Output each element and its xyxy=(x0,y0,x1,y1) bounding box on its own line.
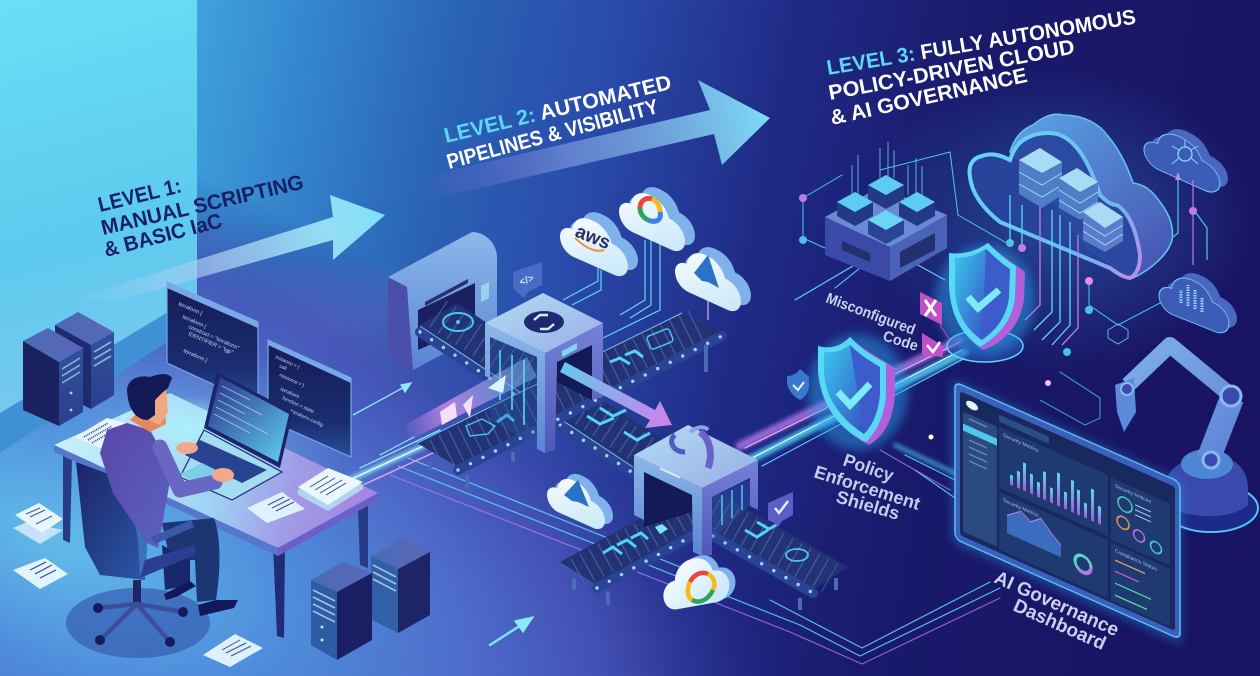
heading: level 1: LEVEL 1: xyxy=(96,175,184,217)
machine: source printer xyxy=(388,232,497,370)
papers: desk right xyxy=(247,468,363,523)
torso xyxy=(100,423,172,548)
heading: level 3: POLICY-DRIVEN CLOUD xyxy=(827,35,1077,105)
heading: level 2: PIPELINES & VISIBILITY xyxy=(444,95,661,174)
heading: level 3 xyxy=(825,6,1138,130)
chair base xyxy=(66,580,210,658)
conveyor: upper left to lower right xyxy=(420,303,670,473)
code window: terraform right: function = state xyxy=(281,395,315,415)
heading: level 1: MANUAL SCRIPTING xyxy=(99,171,306,240)
arrow: level 1 to level 2 xyxy=(70,195,385,300)
icon: small cloud chart xyxy=(1159,262,1237,337)
code window: terraform left: IDENTIFIER = "tgp" xyxy=(187,331,234,356)
code window: terraform left: terraform { xyxy=(177,301,203,317)
panel: level 3 autonomous governance xyxy=(787,114,1258,655)
arrow: output to next gate xyxy=(560,362,672,428)
dashboard rings: security notices: Security Notices xyxy=(1115,483,1151,505)
heading: level 3: & AI GOVERNANCE xyxy=(828,64,1029,130)
label: misconfigured code: Misconfigured xyxy=(824,290,918,339)
node dots xyxy=(799,194,1197,440)
chair back and seat xyxy=(76,462,195,580)
lines rising into cloud xyxy=(1010,195,1078,345)
legs xyxy=(162,518,238,616)
paper: desk left xyxy=(75,418,125,448)
icon: misconfigured check tag xyxy=(922,333,943,357)
panel: level 1 manual workspace xyxy=(13,282,430,667)
conveyor: lower left to upper right xyxy=(417,313,722,488)
code window: terraform right xyxy=(268,340,351,457)
icon: check bubble xyxy=(768,492,793,527)
hands xyxy=(176,442,234,482)
icon: laptop xyxy=(180,372,293,500)
heading: level 1: & BASIC IaC xyxy=(102,209,224,262)
policy shield base xyxy=(947,330,1023,362)
icon: back servers xyxy=(23,312,114,426)
dashboard progress: compliance status: Compliance Status xyxy=(1115,548,1157,573)
connector lines to clouds xyxy=(563,240,708,338)
code window: terraform left: terraform { xyxy=(182,348,208,364)
icon: small cube node xyxy=(1108,324,1128,344)
connectors between small clouds xyxy=(1172,172,1207,265)
arrow: level 2 to level 3 xyxy=(410,80,770,203)
code window: terraform left: terraform { xyxy=(181,314,207,330)
icon: front servers xyxy=(311,538,430,660)
label: ai governance dashboard: AI Governance xyxy=(991,567,1122,641)
dashboard bar chart: security metrics xyxy=(999,427,1108,536)
icon: aws cloud: aws xyxy=(572,221,613,254)
dashboard bar chart: security metrics: Security Metrics xyxy=(1003,433,1039,454)
arrow: translucent input through gate xyxy=(405,357,537,440)
icon: code bubble: </> xyxy=(518,273,536,288)
code window: terraform right: resource = } xyxy=(278,372,305,389)
conveyor: second gate to right xyxy=(713,490,848,610)
desk xyxy=(54,393,378,638)
conveyor: lower left to second gate xyxy=(560,500,702,605)
icon: small cloud network xyxy=(1144,116,1228,197)
heading: level 3: LEVEL 3: FULLY AUTONOMOUS xyxy=(825,6,1138,80)
person at desk on chair xyxy=(66,374,238,658)
label: policy enforcement shields: Shields xyxy=(834,487,902,524)
icon: lower policy shield xyxy=(808,334,908,450)
cube stacks xyxy=(837,175,935,244)
icon: azure cloud lower xyxy=(547,464,613,533)
dashboard area chart: security metrics xyxy=(999,492,1108,598)
code window: terraform left xyxy=(167,282,258,405)
icon: google cloud lower xyxy=(662,549,736,612)
server racks xyxy=(1019,148,1123,252)
glowing circuit lines xyxy=(345,152,1160,664)
label: policy enforcement shields: Enforcement xyxy=(812,462,923,514)
heading: level 2: LEVEL 2: AUTOMATED xyxy=(442,71,674,148)
code window: terraform right: instance = { xyxy=(274,354,301,371)
code window: terraform right: terraform xyxy=(279,386,300,400)
label: policy enforcement shields: Policy xyxy=(841,450,896,486)
panel: dashboard xyxy=(952,379,1182,645)
label: misconfigured code: Code xyxy=(881,328,920,355)
icon: chip cluster server xyxy=(825,142,947,281)
label: ai governance dashboard: Dashboard xyxy=(1010,595,1109,655)
gate: second pipeline stage xyxy=(634,425,758,556)
icon: misconfigured x tag xyxy=(920,292,950,340)
icon: robot arm xyxy=(1115,345,1258,532)
code window: terraform right: terraform-config xyxy=(289,408,324,429)
icon: azure cloud xyxy=(675,235,751,316)
dashboard sidebar xyxy=(963,398,1049,570)
dashboard progress: compliance status xyxy=(1111,542,1170,627)
icon: code bubble xyxy=(513,262,542,298)
dashboard area chart: security metrics: Security Metrics xyxy=(1003,498,1039,519)
dashboard rings: security notices xyxy=(1111,477,1170,566)
icon: aws cloud xyxy=(560,200,638,281)
head xyxy=(127,374,172,432)
arm xyxy=(160,447,215,490)
code window: terraform left: construct = "terraform" xyxy=(187,324,240,352)
panel: level 2 automated pipeline xyxy=(388,175,848,612)
icon: upper policy shield xyxy=(935,243,1035,355)
icon: google cloud xyxy=(619,175,695,256)
papers: floor xyxy=(13,503,263,667)
code window: terraform right: call xyxy=(278,363,287,372)
gate: first pipeline stage xyxy=(485,293,603,453)
icon: main cloud with servers xyxy=(970,114,1172,345)
armrest xyxy=(151,520,194,544)
icon: small shield xyxy=(787,369,809,400)
small flow arrows xyxy=(353,383,533,632)
